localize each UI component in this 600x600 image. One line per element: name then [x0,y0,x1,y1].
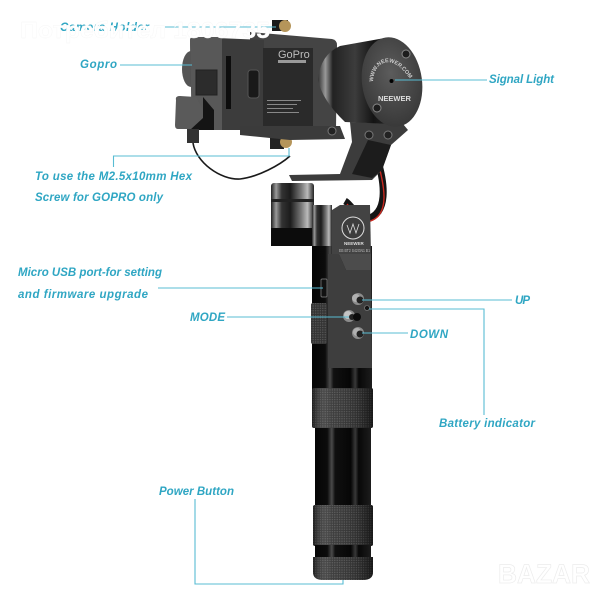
usb plug [175,96,203,129]
lower grip [313,505,373,546]
usb port [321,279,327,297]
lower mounting bar [240,126,345,140]
brass screws [272,20,288,31]
camera mounting plate [250,32,337,130]
callout: Camera Holder: Camera Holder [60,22,150,34]
gimbal product photo: NEEWER [344,241,365,246]
gimbal product photo [175,20,422,580]
wiring [345,155,383,219]
callout: Micro USB port: and firmware upgrade [18,289,149,301]
small knurl ring [311,303,327,344]
logo plate [332,205,371,255]
power button end cap [313,557,373,580]
callout: DOWN: DOWN [410,329,449,341]
control panel [328,254,372,368]
callout: hex screw: Screw for GOPRO only [35,192,164,204]
gopro body [190,37,264,130]
gopro logo text: GoPro [278,49,310,61]
callout: hex screw: To use the M2.5x10mm Hex [35,171,193,183]
callout: Signal Light: Signal Light [489,74,555,86]
callout: Battery indicator [369,309,536,430]
callout: UP: UP [515,295,530,307]
arm bracket [289,122,408,181]
gimbal product photo: EB BT2 S42GN1 B1 [339,248,370,253]
callout: Battery indicator: Battery indicator [439,418,536,430]
callout: Gopro: Gopro [80,59,117,71]
callout: Power Button [159,486,343,584]
camera lens [182,51,200,87]
callout: Gopro [80,59,192,71]
callout: Micro USB port: Micro USB port-for setting [18,267,162,279]
callout: Micro USB port [18,267,323,301]
roll motor [318,38,392,124]
handle tube [312,205,332,255]
watermark: bazar logo: BAZAR [498,559,590,589]
control buttons [343,293,370,339]
motor end cap: WWW.NEEWER.COM [369,58,412,82]
pan motor cylinder [271,183,314,246]
dark collar [315,545,371,558]
motor end cap: NEEWER [378,94,412,103]
callout: Power Button: Power Button [159,486,234,498]
upper grip [312,388,373,428]
cable from camera to handle [193,143,290,179]
callout: MODE: MODE [190,312,225,324]
callout: hex screw [35,148,289,204]
motor end cap [362,37,422,125]
watermark: user id: Потребител 1806735 [20,17,270,43]
callout: DOWN [362,329,449,341]
